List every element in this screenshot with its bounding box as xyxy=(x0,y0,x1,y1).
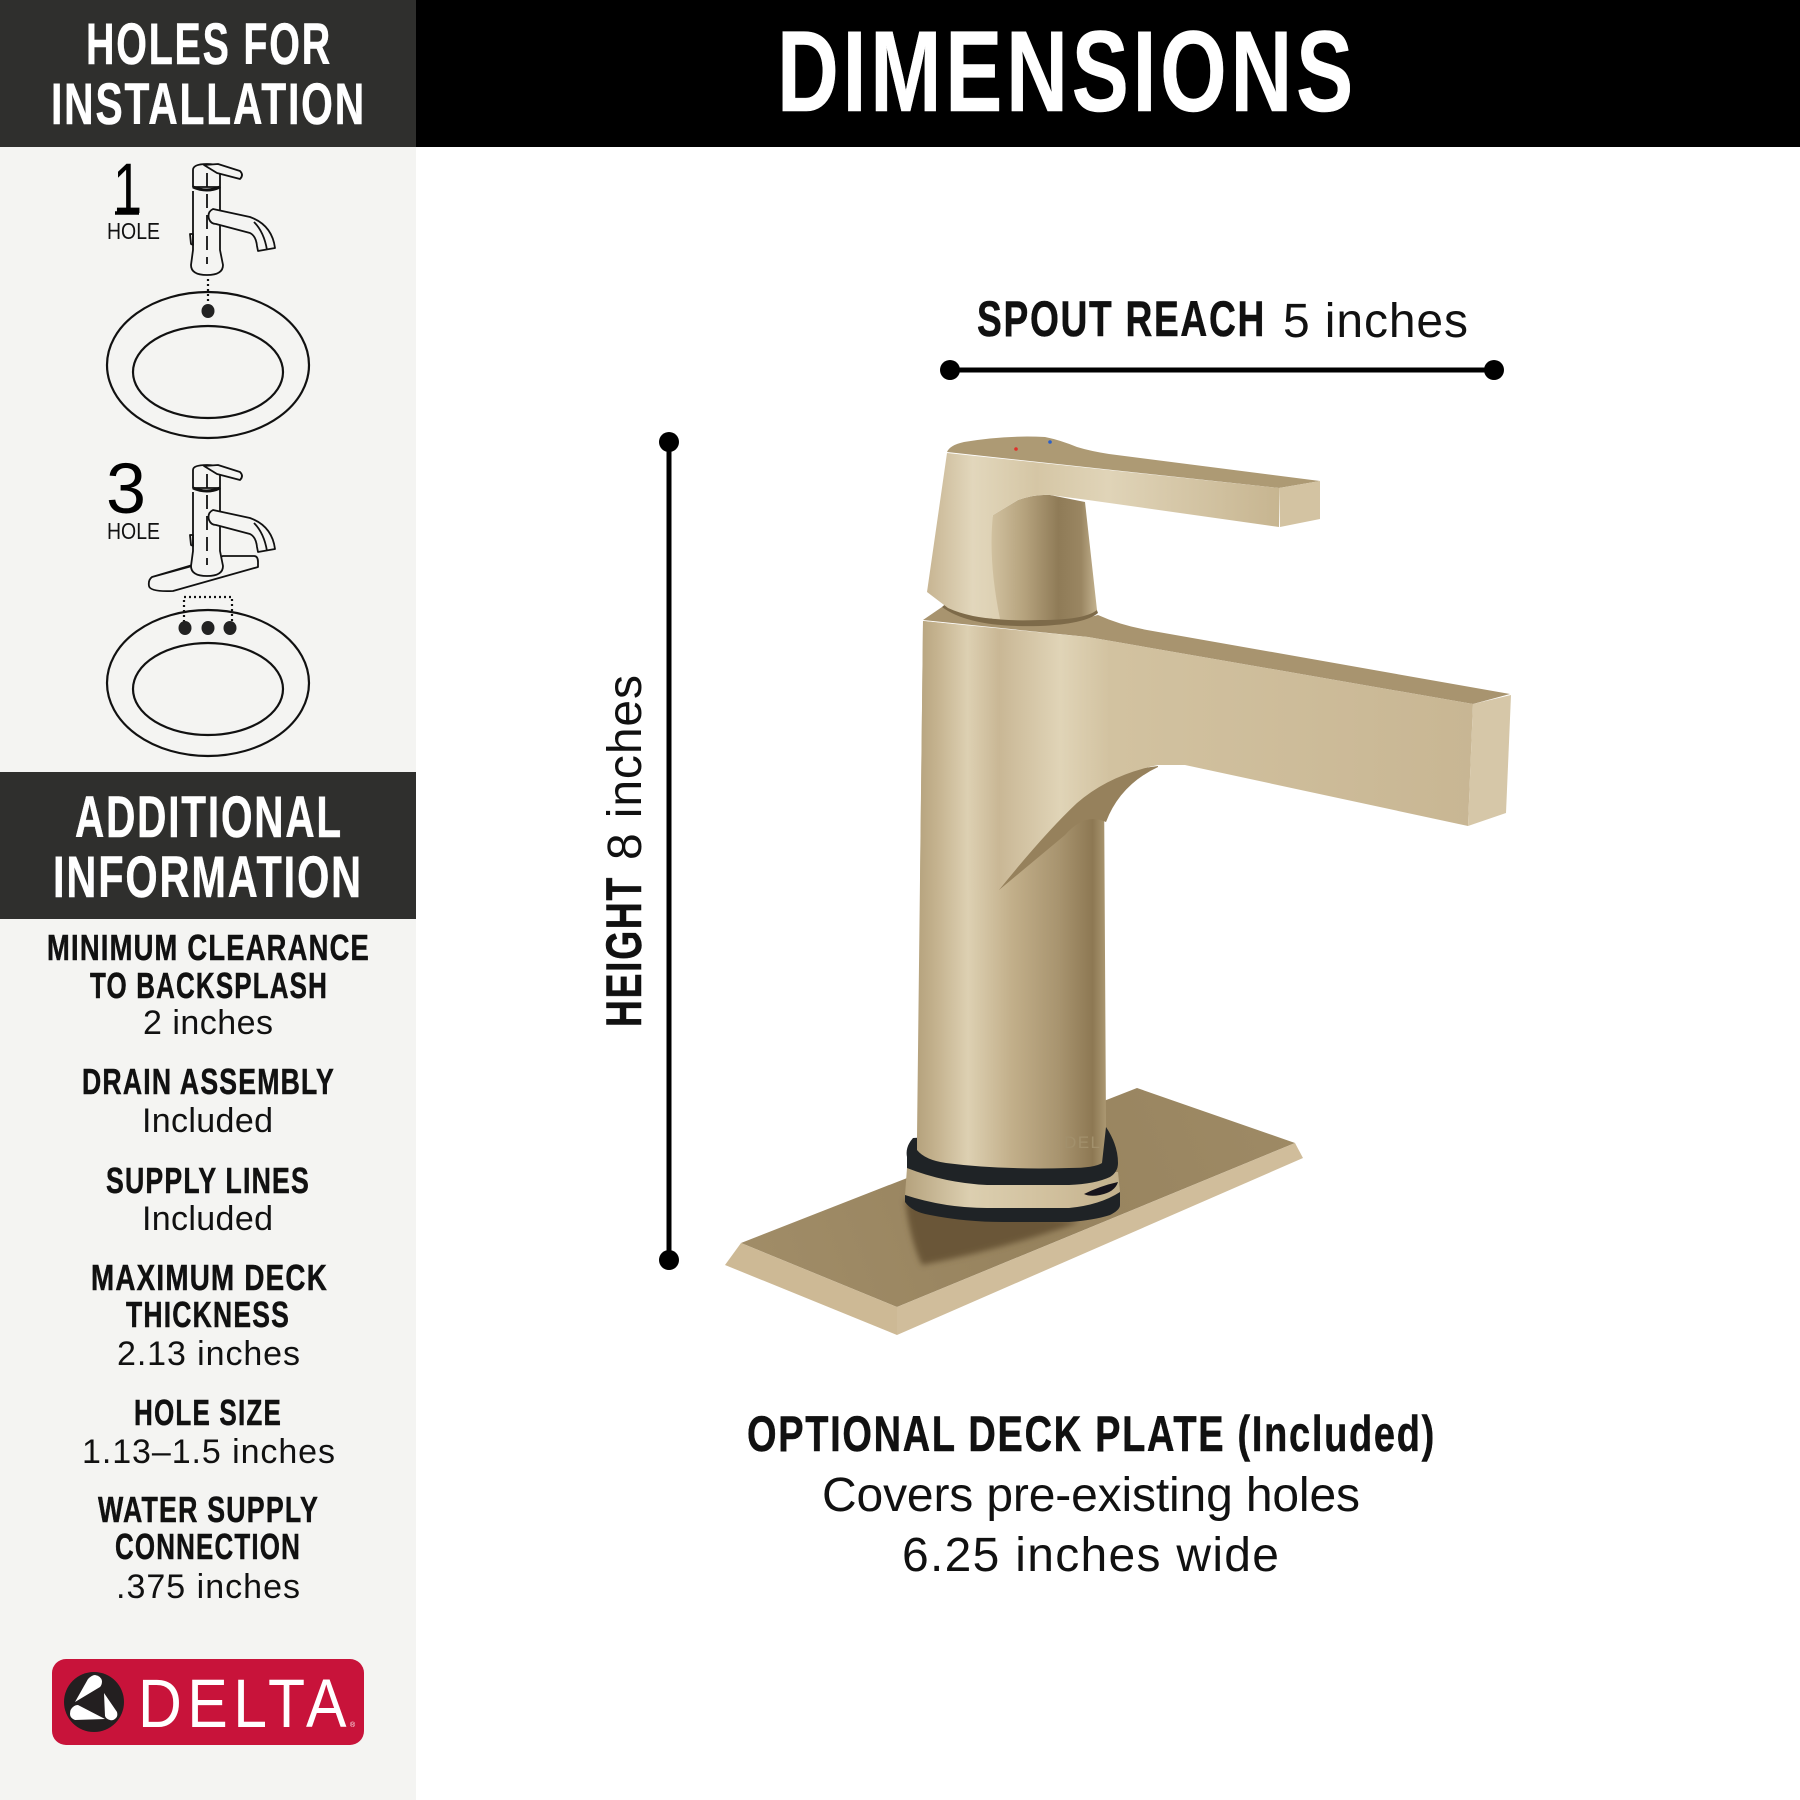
text block: minimum clearance: 2 inches xyxy=(143,1004,273,1042)
title: DIMENSIONS xyxy=(777,8,1357,136)
text block: drain assembly xyxy=(82,1061,335,1140)
logo: delta: DELTA xyxy=(138,1665,352,1742)
arrow: height dimension line xyxy=(659,432,679,1270)
icon: one hole faucet and sink: HOLE xyxy=(107,218,160,244)
text block: drain assembly: DRAIN ASSEMBLY xyxy=(82,1061,335,1102)
header: holes for installation: HOLES FOR xyxy=(86,12,332,77)
faucet logo mark: DEL xyxy=(1064,1133,1100,1152)
dimension: height label: 8 inches xyxy=(599,675,652,860)
faucet body xyxy=(917,621,1106,1168)
text block: drain assembly: Included xyxy=(142,1102,273,1140)
panel: left sidebar background xyxy=(0,0,416,1800)
text block: maximum deck thickness: 2.13 inches xyxy=(117,1335,300,1373)
text block: hole size xyxy=(82,1392,335,1471)
text block: supply lines: Included xyxy=(142,1200,273,1238)
text block: hole size: HOLE SIZE xyxy=(134,1392,282,1433)
text block: optional deck plate: OPTIONAL DECK PLATE (Included) xyxy=(747,1406,1436,1462)
icon: one hole faucet and sink: 1 xyxy=(113,150,142,229)
logo: delta xyxy=(52,1659,364,1745)
text block: minimum clearance: MINIMUM CLEARANCE xyxy=(47,927,370,968)
header: dimensions title bar xyxy=(416,0,1800,147)
text block: optional deck plate: Covers pre-existing holes xyxy=(822,1469,1360,1522)
header: holes for installation xyxy=(0,0,416,147)
text block: minimum clearance xyxy=(47,927,370,1042)
spout xyxy=(920,607,1511,890)
handle lever xyxy=(927,437,1320,626)
text block: minimum clearance: TO BACKSPLASH xyxy=(90,965,328,1006)
dimension: height label: HEIGHT xyxy=(596,876,652,1027)
dimension: spout reach label: 5 inches xyxy=(1283,295,1468,348)
icon: one hole faucet and sink xyxy=(107,150,309,438)
text block: supply lines: SUPPLY LINES xyxy=(106,1160,310,1201)
deck plate xyxy=(725,1088,1303,1335)
text block: maximum deck thickness: THICKNESS xyxy=(126,1294,290,1335)
arrow: spout reach dimension line xyxy=(940,360,1504,380)
text block: supply lines xyxy=(106,1160,310,1238)
header: additional information: ADDITIONAL xyxy=(75,785,343,850)
header: additional information xyxy=(0,772,416,919)
dimension: height label xyxy=(596,675,652,1027)
text block: water supply connection: .375 inches xyxy=(116,1568,300,1606)
icon: three hole faucet, deck plate and sink: 3 xyxy=(106,450,146,529)
icon: three hole faucet, deck plate and sink: HOLE xyxy=(107,518,160,544)
text block: maximum deck thickness: MAXIMUM DECK xyxy=(91,1257,328,1298)
text block: water supply connection: WATER SUPPLY xyxy=(98,1489,319,1530)
text block: water supply connection xyxy=(98,1489,319,1606)
faucet product illustration xyxy=(725,437,1511,1335)
icon: three hole faucet, deck plate and sink xyxy=(106,450,309,756)
header: additional information: INFORMATION xyxy=(53,845,363,910)
header: holes for installation: INSTALLATION xyxy=(51,72,366,137)
logo: delta: ® xyxy=(350,1721,356,1729)
text block: optional deck plate xyxy=(747,1406,1436,1582)
dimension: spout reach label: SPOUT REACH xyxy=(977,291,1266,347)
base gasket xyxy=(905,1127,1120,1222)
text block: hole size: 1.13–1.5 inches xyxy=(82,1433,335,1471)
text block: water supply connection: CONNECTION xyxy=(115,1526,301,1567)
text block: optional deck plate: 6.25 inches wide xyxy=(902,1529,1279,1582)
text block: maximum deck thickness xyxy=(91,1257,328,1373)
